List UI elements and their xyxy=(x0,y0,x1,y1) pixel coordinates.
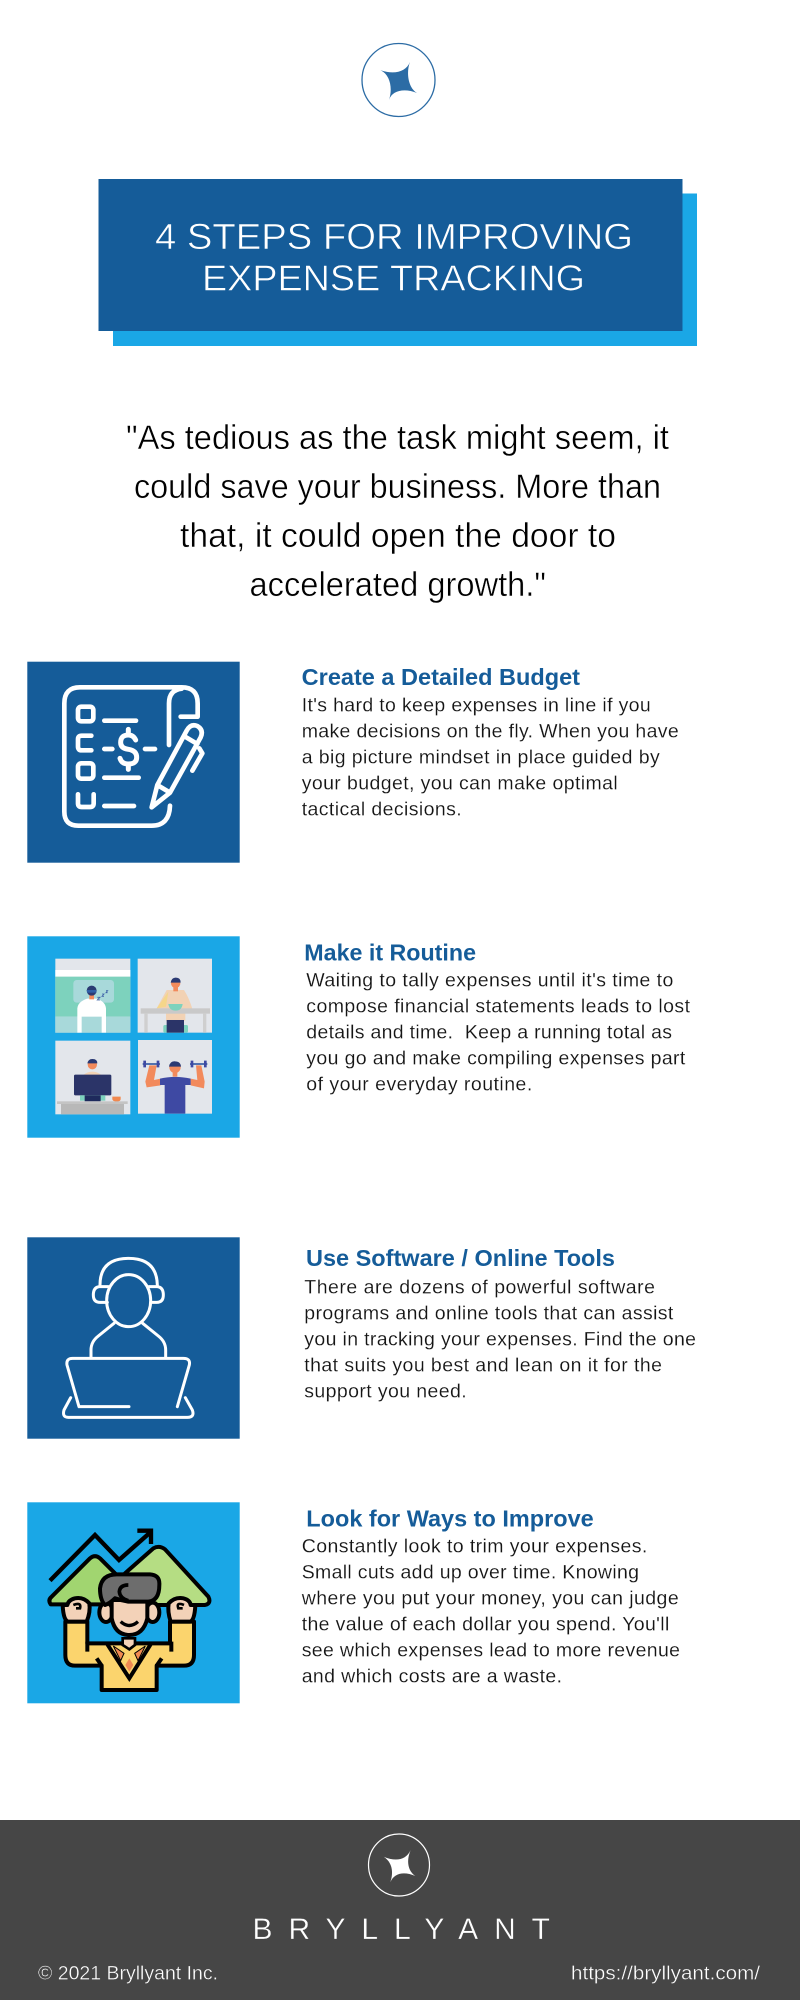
quote: "As tedious as the task might seem, it xyxy=(126,419,670,457)
text: software body: There are dozens of powerful software xyxy=(304,1276,655,1298)
text: improve body: and which costs are a waste. xyxy=(302,1665,562,1687)
text: improve body xyxy=(301,1535,680,1687)
text: routine body: compose financial statements leads to lost xyxy=(306,996,691,1018)
icon: person lifting mountains with growth arrow xyxy=(49,1531,209,1690)
text: software body: you in tracking your expenses. Find the one xyxy=(304,1328,696,1350)
text: improve body: see which expenses lead to more revenue xyxy=(302,1639,680,1661)
text: budget body: make decisions on the fly. When you have xyxy=(302,721,679,743)
quote xyxy=(126,419,670,604)
text: routine body: of your everyday routine. xyxy=(306,1074,532,1096)
text: improve body: where you put your money, you can judge xyxy=(301,1587,679,1609)
title banner: 4 STEPS FOR IMPROVING xyxy=(155,216,633,257)
website url: https://bryllyant.com/ xyxy=(571,1962,761,1984)
text: software body xyxy=(304,1276,696,1402)
heading: use software / online tools: Use Software / Online Tools xyxy=(306,1245,615,1271)
panel: budget icon xyxy=(27,662,240,863)
panel: routine illustration xyxy=(27,936,240,1138)
text: budget body: your budget, you can make optimal xyxy=(302,773,618,795)
copyright: © 2021 Bryllyant Inc. xyxy=(38,1962,218,1984)
title banner xyxy=(98,179,697,346)
text: routine body: Waiting to tally expenses until it's time to xyxy=(306,970,673,992)
logo: footer star badge xyxy=(368,1834,430,1896)
logo: top star badge xyxy=(362,44,435,116)
text: software body: that suits you best and lean on it for the xyxy=(304,1354,662,1376)
text: improve body: Small cuts add up over time. Knowing xyxy=(302,1561,639,1583)
quote: that, it could open the door to xyxy=(180,517,616,555)
icon: person with headset at laptop xyxy=(64,1258,193,1417)
text: improve body: the value of each dollar you spend. You'll xyxy=(302,1613,669,1635)
icon: four daily routine scenes xyxy=(55,959,212,1114)
text: routine body: details and time. Keep a running total as xyxy=(306,1022,672,1044)
text: budget body: It's hard to keep expenses in line if you xyxy=(302,695,651,717)
heading: create a detailed budget: Create a Detailed Budget xyxy=(302,664,580,690)
text: software body: support you need. xyxy=(304,1380,467,1402)
icon: budget document and pen xyxy=(64,687,202,826)
heading: look for ways to improve: Look for Ways to Improve xyxy=(306,1506,594,1532)
text: software body: programs and online tools that can assist xyxy=(304,1302,674,1324)
quote: accelerated growth." xyxy=(250,566,546,604)
title banner: EXPENSE TRACKING xyxy=(202,258,585,298)
panel: improve icon xyxy=(27,1502,240,1703)
text: routine body xyxy=(306,970,691,1096)
text: routine body: you go and make compiling expenses part xyxy=(306,1048,686,1070)
heading: make it routine: Make it Routine xyxy=(304,940,476,966)
quote: could save your business. More than xyxy=(134,468,661,506)
footer xyxy=(0,1820,800,2000)
text: budget body: a big picture mindset in place guided by xyxy=(302,747,660,769)
text: improve body: Constantly look to trim your expenses. xyxy=(302,1535,647,1557)
panel: software icon xyxy=(27,1237,240,1439)
brand name: BRYLLYANT xyxy=(252,1913,550,1946)
text: budget body xyxy=(302,695,679,821)
text: budget body: tactical decisions. xyxy=(302,799,462,821)
